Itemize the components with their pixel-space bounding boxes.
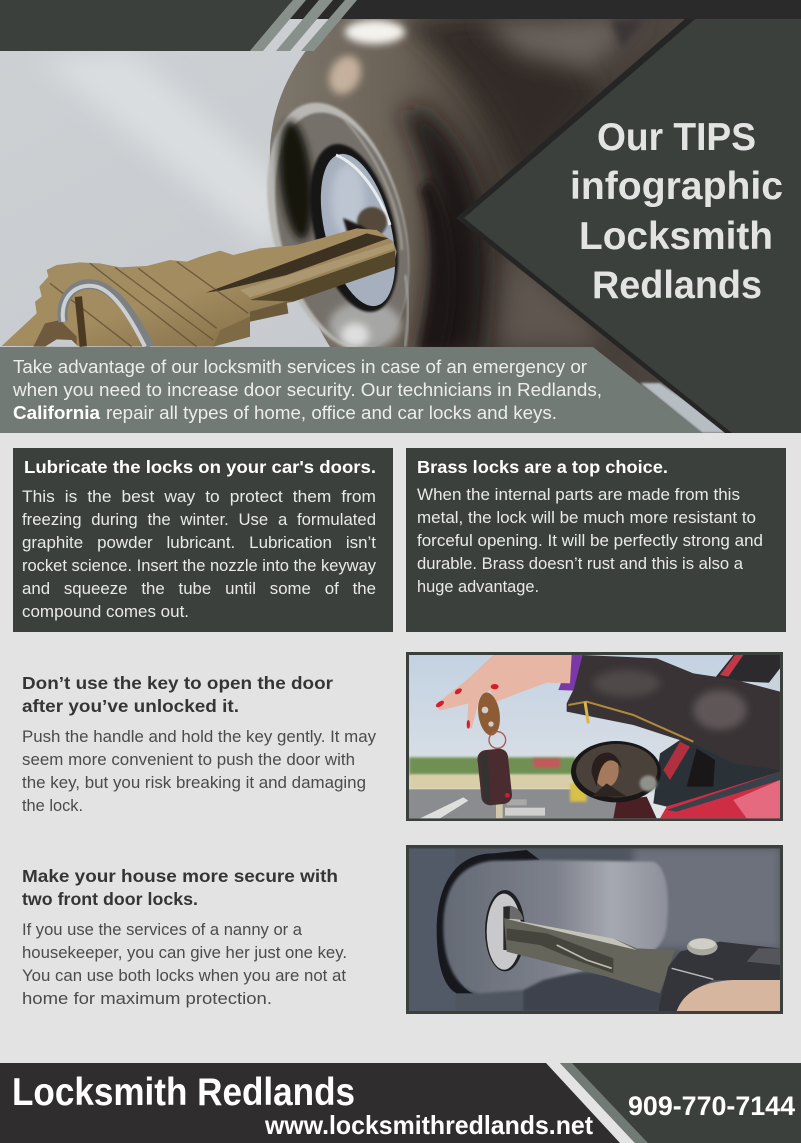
title: Our TIPS — [597, 116, 756, 159]
body: don't use the key: Push the handle and hold the key gently. It may — [22, 728, 377, 746]
key head — [658, 942, 780, 1011]
heading: brass: Brass locks are a top choice. — [417, 457, 668, 477]
title — [570, 116, 783, 307]
heading: don't use the key: Don’t use the key to open the door — [22, 673, 333, 693]
photo: key in frozen car lock — [406, 845, 783, 1014]
key — [2, 228, 397, 347]
body: two locks: home for maximum protection. — [22, 990, 272, 1008]
keyway — [357, 207, 387, 237]
heading: two locks — [22, 866, 338, 909]
body: lubricate — [22, 488, 377, 621]
body: brass: metal, the lock will be much more resistant to — [417, 509, 756, 527]
cup rim — [266, 102, 410, 347]
body: don't use the key: the key, but you risk breaking it and damaging — [22, 774, 366, 792]
body: two locks — [22, 921, 347, 1008]
footer phone: 909-770-7144 — [628, 1091, 795, 1121]
body: lubricate: graphite powder lubricant. Lubrication isn’t — [22, 534, 376, 552]
car — [713, 655, 780, 683]
photo: hand holding car key — [406, 652, 783, 821]
silver strip of photo below panel — [640, 383, 735, 433]
footer band — [0, 1063, 801, 1143]
body: lubricate: and squeeze the tube until some of the — [22, 580, 376, 598]
heading: don't use the key — [22, 673, 333, 716]
body: brass: forceful opening. It will be perfectly strong and — [417, 532, 763, 550]
body: two locks: You can use both locks when you are not at — [22, 967, 346, 985]
intro text: when you need to increase door security. Our technicians in Redlands, — [12, 379, 602, 400]
body: two locks: If you use the services of a nanny or a — [22, 921, 303, 939]
dark title panel — [456, 19, 801, 433]
intro panel — [0, 347, 702, 433]
body: don't use the key: the lock. — [22, 797, 83, 815]
body: two locks: housekeeper, you can give her just one key. — [22, 944, 347, 962]
body: lubricate: compound comes out. — [22, 603, 189, 621]
top bar — [290, 0, 801, 19]
header diagonal stripes — [250, 0, 357, 51]
intro text: California — [13, 402, 101, 423]
footer diagonal stripes — [546, 1063, 635, 1143]
footer website: www.locksmithredlands.net — [264, 1110, 593, 1140]
body: brass: durable. Brass doesn’t rust and this is also a — [417, 555, 744, 573]
body: lubricate: This is the best way to protect them from — [22, 488, 376, 506]
title: Redlands — [592, 264, 762, 307]
side mirror — [571, 741, 661, 802]
key blade — [504, 918, 675, 993]
heading: don't use the key: after you’ve unlocked it. — [22, 696, 239, 716]
body: brass: huge advantage. — [417, 578, 539, 596]
body: lubricate: freezing during the winter. Use a formulated — [22, 511, 376, 529]
intro text: repair all types of home, office and car locks and keys. — [106, 402, 557, 423]
key fob — [478, 692, 500, 736]
body: don't use the key: seem more convenient to push the door with — [22, 751, 355, 769]
body: don't use the key — [22, 728, 377, 815]
panel: brass locks — [406, 448, 786, 632]
footer brand name: Locksmith Redlands — [12, 1071, 355, 1114]
heading: two locks: Make your house more secure with — [22, 866, 338, 886]
intro text — [12, 356, 602, 423]
hero photo: key in door knob — [0, 19, 801, 433]
heading: lubricate: Lubricate the locks on your car's doors. — [24, 457, 376, 477]
panel: lubricate the locks — [13, 448, 393, 632]
intro text: Take advantage of our locksmith services in case of an emergency or — [13, 356, 587, 377]
header band — [0, 0, 293, 51]
title: infographic — [570, 165, 783, 208]
body: brass: When the internal parts are made from this — [417, 486, 740, 504]
leather sleeve — [567, 655, 780, 770]
lock cylinder — [320, 154, 396, 306]
body: brass — [417, 486, 763, 596]
purple cuff — [558, 655, 583, 691]
tip: two front door locks — [22, 866, 347, 1008]
thumb — [677, 980, 780, 1011]
tip: don't use the key — [22, 673, 377, 815]
body: lubricate: rocket science. Insert the nozzle into the keyway — [22, 557, 377, 575]
hand — [435, 655, 572, 728]
title: Locksmith — [579, 215, 773, 258]
heading: two locks: two front door locks. — [22, 889, 198, 909]
door knob — [266, 19, 725, 433]
